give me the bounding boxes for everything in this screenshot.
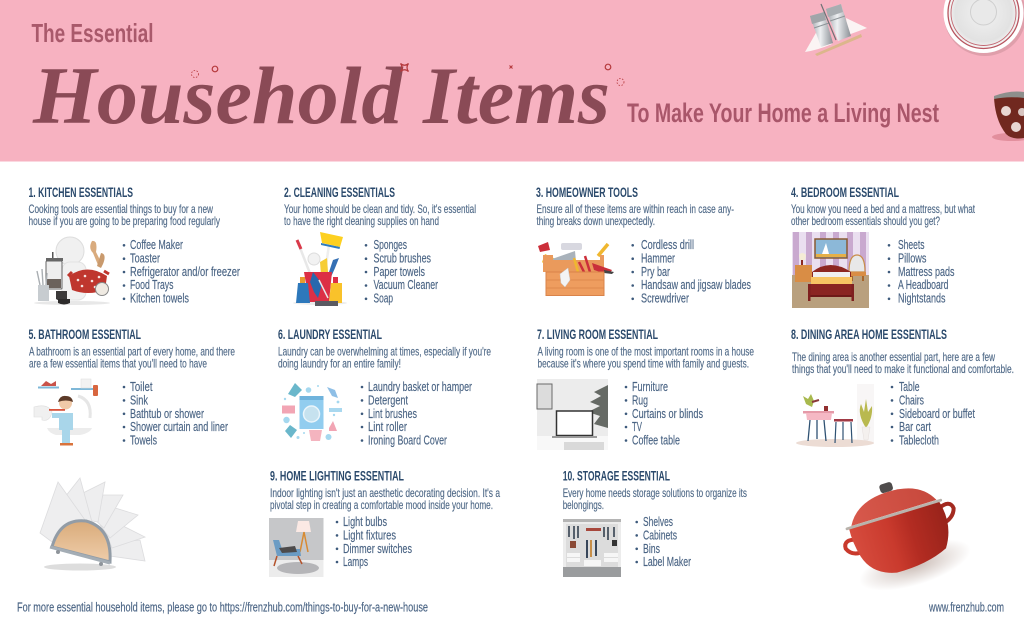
list: Sideboard or buffet <box>899 406 975 421</box>
description: Cooking tools are essential things to buy for a new <box>28 202 213 216</box>
heading: 5. BATHROOM ESSENTIAL <box>28 327 141 342</box>
list: Scrub brushes <box>374 250 431 265</box>
list: Food Trays <box>130 277 174 292</box>
icon: kitchen tools <box>34 237 110 305</box>
description: because it's where you spend time with family and guests. <box>538 356 749 370</box>
description <box>563 486 747 512</box>
list: Coffee Maker <box>130 237 183 252</box>
description: Every home needs storage solutions to organize its <box>563 486 747 500</box>
icon: dining table and stool <box>796 384 874 447</box>
list: Table <box>899 379 920 394</box>
description: thing breaks down unexpectedly. <box>536 214 655 228</box>
icon: napkin holder <box>40 478 145 570</box>
list <box>336 514 412 569</box>
icon: washing machine and laundry items <box>282 383 342 441</box>
list <box>635 514 691 569</box>
list <box>123 379 228 448</box>
heading: 6. LAUNDRY ESSENTIAL <box>278 327 382 342</box>
list: Lamps <box>343 554 368 569</box>
list: Chairs <box>899 392 924 407</box>
list: Bathtub or shower <box>130 406 204 421</box>
list: Ironing Board Cover <box>368 432 447 448</box>
list: Mattress pads <box>898 264 955 279</box>
panel: living room essential <box>537 327 754 450</box>
panel: kitchen essentials <box>28 185 240 306</box>
photo: laptop in living room <box>537 379 608 450</box>
list: Shower curtain and liner <box>130 419 228 434</box>
heading: 4. BEDROOM ESSENTIAL <box>791 185 899 200</box>
description <box>278 344 491 370</box>
list: Toilet <box>130 379 153 394</box>
list: Tablecloth <box>899 432 939 448</box>
panel: homeowner tools <box>536 185 751 306</box>
list: Curtains or blinds <box>632 406 703 421</box>
description: are a few essential items that you'll need to have <box>29 356 207 370</box>
list: Light fixtures <box>343 527 396 542</box>
list: A Headboard <box>898 277 948 292</box>
list: Paper towels <box>374 264 425 279</box>
description: Ensure all of these items are within reach in case any- <box>536 202 734 216</box>
list: Bar cart <box>899 419 931 434</box>
list: Detergent <box>368 392 408 407</box>
header banner <box>0 0 1024 162</box>
panel: dining area home essentials <box>791 327 1014 448</box>
list <box>631 237 751 306</box>
list: Hammer <box>641 250 675 265</box>
list: Refrigerator and/or freezer <box>130 264 240 279</box>
list: Label Maker <box>643 554 691 569</box>
panel: bathroom essential <box>28 327 235 448</box>
heading: 2. CLEANING ESSENTIALS <box>284 185 395 200</box>
footer: source link: For more essential household items, please go to https://frenzhub.com/things-to-buy-for-a-new-house <box>17 600 428 614</box>
description <box>536 202 734 228</box>
panel: laundry essential <box>278 327 491 448</box>
description <box>791 202 975 228</box>
icon: toolbox <box>538 242 614 296</box>
description: house if you are going to be preparing food regularly <box>28 214 220 228</box>
list: Kitchen towels <box>130 291 189 306</box>
icon: red pot <box>831 466 976 601</box>
description: Indoor lighting isn't just an aesthetic decorating decision. It's a <box>270 486 500 500</box>
list: Cordless drill <box>641 237 694 252</box>
list: Furniture <box>632 379 668 394</box>
description: doing laundry for an entire family! <box>278 356 401 370</box>
icon: person brushing teeth <box>34 379 98 446</box>
list: Bins <box>643 541 660 556</box>
icon: plate <box>944 0 1024 56</box>
icon: salt and pepper shakers <box>805 4 867 56</box>
list: Pry bar <box>641 264 670 279</box>
list <box>625 379 703 448</box>
script title: Household Items <box>32 50 610 141</box>
list <box>891 379 975 448</box>
heading: 10. STORAGE ESSENTIAL <box>563 468 670 484</box>
list: Pillows <box>898 250 927 265</box>
description <box>284 202 476 228</box>
illustration: bedroom <box>792 232 869 308</box>
list: Soap <box>374 291 393 306</box>
icon: polka dot cup <box>992 92 1024 141</box>
overline: The Essential: The Essential <box>32 18 154 48</box>
description: Your home should be clean and tidy. So, it's essential <box>284 202 476 216</box>
icon: cleaning supplies <box>293 232 347 306</box>
description <box>28 202 220 228</box>
heading: 7. LIVING ROOM ESSENTIAL <box>537 327 658 342</box>
panel: home lighting essential <box>269 468 500 577</box>
heading: 9. HOME LIGHTING ESSENTIAL <box>270 468 404 484</box>
list: Coffee table <box>632 432 680 448</box>
description: pivotal step in creating a comfortable mood inside your home. <box>270 498 493 512</box>
heading: 1. KITCHEN ESSENTIALS <box>28 185 133 200</box>
list: Lint roller <box>368 419 407 434</box>
description: A living room is one of the most important rooms in a house <box>538 344 754 358</box>
list: Screwdriver <box>641 291 689 306</box>
description <box>270 486 500 512</box>
panel: bedroom essential <box>791 185 975 308</box>
list: Shelves <box>643 514 673 529</box>
list: Light bulbs <box>343 514 387 529</box>
illustration: wardrobe <box>563 519 621 577</box>
list: Rug <box>632 392 648 407</box>
list <box>365 237 438 306</box>
list: Handsaw and jigsaw blades <box>641 277 751 292</box>
list: Towels <box>130 432 157 448</box>
list: Nightstands <box>898 291 946 306</box>
description: to have the right cleaning supplies on hand <box>284 214 439 228</box>
description: belongings. <box>563 498 604 512</box>
list: Lint brushes <box>368 406 417 421</box>
list: Vacuum Cleaner <box>374 277 438 292</box>
list: Sink <box>130 392 148 407</box>
list <box>361 379 472 448</box>
description <box>29 344 235 370</box>
list: Sponges <box>374 237 407 252</box>
list <box>123 237 240 306</box>
list: Sheets <box>898 237 925 252</box>
heading: 8. DINING AREA HOME ESSENTIALS <box>791 327 947 342</box>
panel: storage essential <box>563 468 747 577</box>
panel: cleaning essentials <box>284 185 476 306</box>
description: Laundry can be overwhelming at times, especially if you're <box>278 344 491 358</box>
description: other bedroom essentials should you get? <box>791 214 940 228</box>
list: Cabinets <box>643 527 677 542</box>
description: A bathroom is an essential part of every home, and there <box>29 344 235 358</box>
list: Toaster <box>130 250 160 265</box>
list: Dimmer switches <box>343 541 412 556</box>
list <box>888 237 955 306</box>
list: Laundry basket or hamper <box>368 379 472 394</box>
photo: armchair and floor lamp <box>269 518 324 577</box>
list: TV <box>632 419 642 434</box>
description <box>538 344 754 370</box>
heading: 3. HOMEOWNER TOOLS <box>536 185 638 200</box>
description <box>792 350 1014 376</box>
sparkle decorations <box>192 64 624 86</box>
